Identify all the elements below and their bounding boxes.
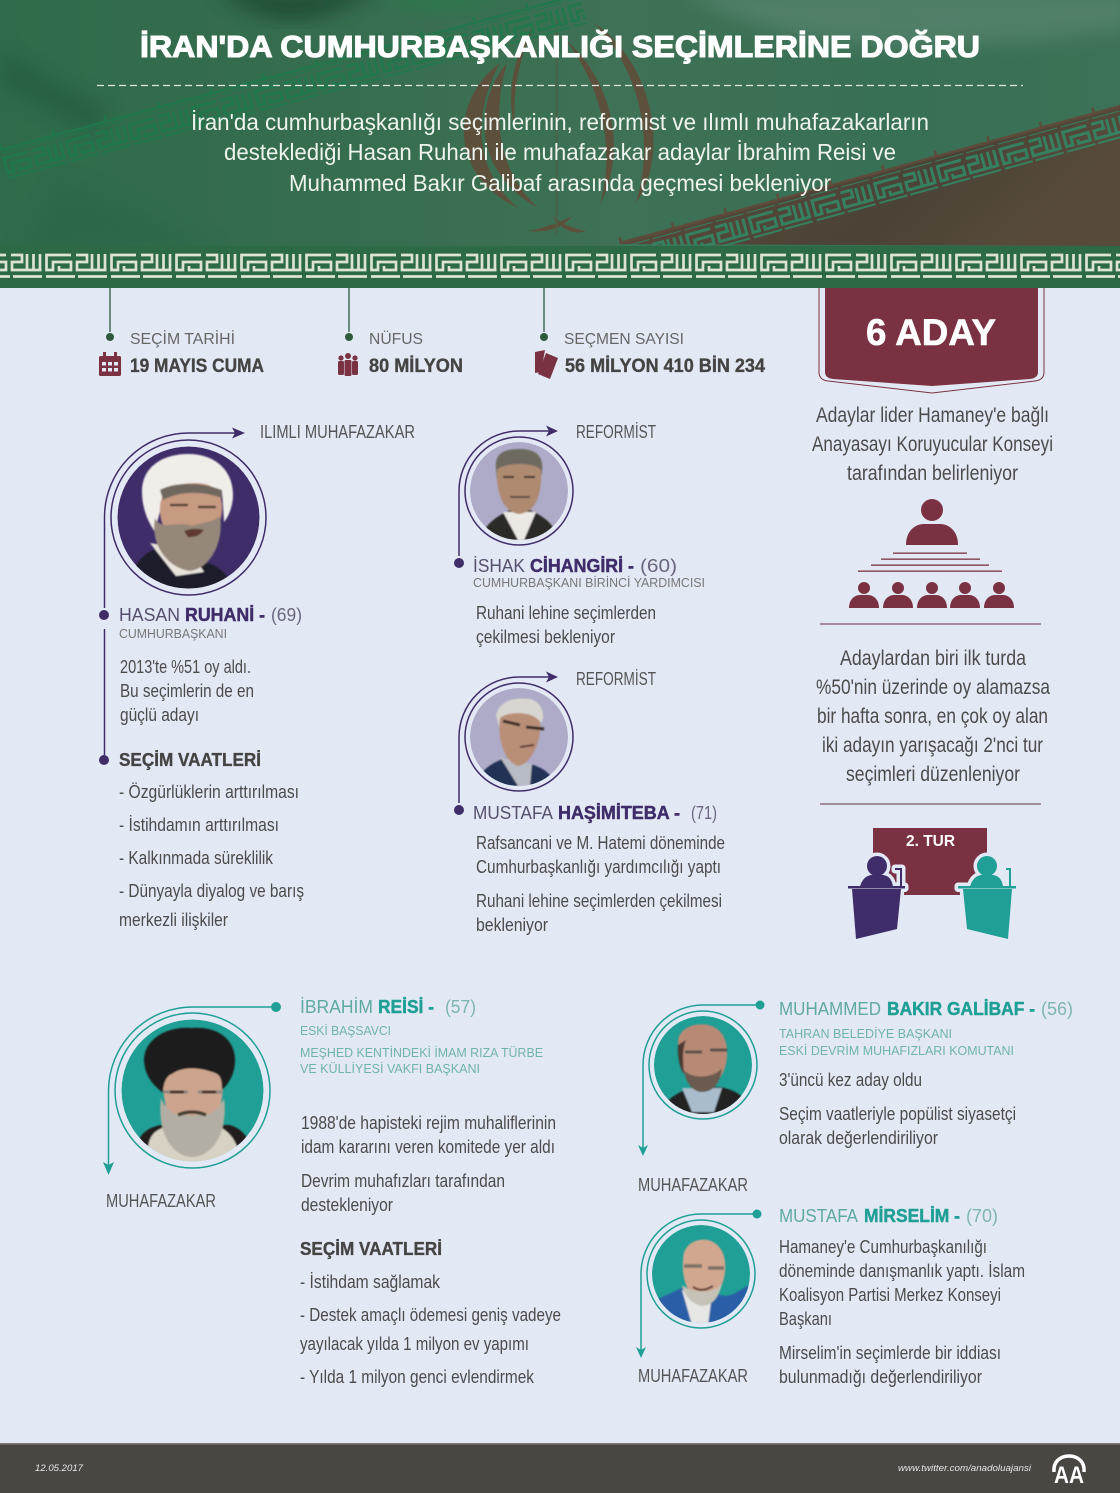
connector arrow <box>108 1007 272 1165</box>
name: Reisi: ESKİ BAŞSAVCI <box>300 1024 391 1038</box>
candidate: Mustafa Mirselim <box>636 1205 1025 1387</box>
text: Hasimiteba description: Ruhani lehine seçimlerden çekilmesi <box>476 890 722 911</box>
text: Ruhani promises: - Özgürlüklerin arttırılması <box>119 781 299 802</box>
icon: calendar <box>99 352 121 376</box>
text: Reisi description: 1988'de hapisteki rejim muhaliflerinin <box>301 1112 556 1133</box>
text: second round rule: seçimleri düzenleniyor <box>846 763 1020 786</box>
text: Reisi promises <box>300 1239 561 1387</box>
text: Cihangiri description: çekilmesi bekleniyor <box>476 626 615 647</box>
portrait: Hasimiteba <box>470 688 568 786</box>
text: Galibaf description: 3'üncü kez aday oldu <box>779 1069 922 1090</box>
text: second round rule <box>816 647 1050 786</box>
portrait: Mirselim <box>652 1225 752 1325</box>
intro text: desteklediği Hasan Ruhani ile muhafazakar adaylar İbrahim Reisi ve <box>224 139 896 165</box>
text: Mirselim description: bulunmadığı değerlendiriliyor <box>779 1366 982 1387</box>
name: Galibaf: MUHAMMED <box>779 998 881 1019</box>
text: Mirselim description: Hamaney'e Cumhurbaşkanılığı <box>779 1236 987 1257</box>
text: Mirselim description: Başkanı <box>779 1308 832 1329</box>
text: council: tarafından belirleniyor <box>847 462 1018 485</box>
banner: 6 aday: 6 ADAY <box>866 312 996 353</box>
decorative kufic band <box>0 246 1120 288</box>
text: Ruhani description: güçlü adayı <box>120 704 199 725</box>
intro text: Muhammed Bakır Galibaf arasında geçmesi bekleniyor <box>289 170 831 196</box>
icon: AA logo: AA <box>1054 1462 1084 1489</box>
text: Mirselim description: Koalisyon Partisi Merkez Konseyi <box>779 1284 1001 1305</box>
text: Mirselim description: döneminde danışmanlık yaptı. İslam <box>779 1260 1025 1281</box>
name: Galibaf <box>756 998 1073 1058</box>
text: second round rule: %50'nin üzerinde oy alamazsa <box>816 676 1050 699</box>
title: İRAN'DA CUMHURBAŞKANLIĞI SEÇİMLERİNE DOĞRU <box>140 29 980 64</box>
text: second round rule: iki adayın yarışacağı 2'nci tur <box>822 734 1043 757</box>
text: Hasimiteba description: bekleniyor <box>476 914 548 935</box>
name: Cihangiri: (60) <box>640 555 677 576</box>
stat: population <box>338 288 463 377</box>
candidate: Ibrahim Reisi: MUHAFAZAKAR <box>106 1190 216 1211</box>
flag: green kufic band <box>0 0 587 179</box>
text: Ruhani promises: SEÇİM VAATLERİ <box>119 750 261 770</box>
connector arrow <box>459 431 552 556</box>
name: Galibaf: (56) <box>1041 998 1073 1019</box>
candidate: Mustafa Hasimiteba <box>454 668 725 935</box>
text: Mirselim description: Mirselim'in seçimlerde bir iddiası <box>779 1342 1001 1363</box>
right column: candidate count and rules <box>812 288 1053 939</box>
name: Hasimiteba <box>454 802 717 823</box>
text: Ruhani promises: - Dünyayla diyalog ve barış <box>119 880 304 901</box>
candidate: Ishak Cihangiri <box>454 421 705 647</box>
name: Reisi: MEŞHED KENTİNDEKİ İMAM RIZA TÜRBE <box>300 1046 543 1060</box>
icon: council pyramid <box>849 499 1014 608</box>
stat: election date: SEÇİM TARİHİ <box>130 329 235 348</box>
name: Mirselim: MİRSELİM - <box>864 1205 960 1226</box>
candidate: Mustafa Hasimiteba: REFORMİST <box>576 668 656 689</box>
connector arrow <box>641 1214 753 1350</box>
name: Ruhani: CUMHURBAŞKANI <box>119 627 227 641</box>
connector arrow <box>643 1005 756 1148</box>
name: Ruhani: RUHANİ - <box>185 604 265 625</box>
text: Reisi description <box>301 1112 556 1215</box>
footer date: 12.05.2017 <box>35 1463 84 1474</box>
name: Galibaf: TAHRAN BELEDİYE BAŞKANI <box>779 1027 952 1041</box>
footer <box>0 1443 1120 1493</box>
text: Reisi description: destekleniyor <box>301 1194 393 1215</box>
name: Reisi <box>271 996 543 1076</box>
text: second round rule: Adaylardan biri ilk turda <box>840 647 1026 670</box>
text: council <box>812 404 1053 485</box>
text: Reisi description: Devrim muhafızları tarafından <box>301 1170 505 1191</box>
candidate: Ibrahim Reisi <box>103 996 561 1387</box>
icon: ballot cards <box>535 350 558 379</box>
name: Mirselim: (70) <box>966 1205 998 1226</box>
intro text: İran'da cumhurbaşkanlığı seçimlerinin, reformist ve ılımlı muhafazakarların <box>191 109 929 135</box>
name: Mirselim: MUSTAFA <box>779 1205 859 1226</box>
banner: 6 aday <box>819 288 1044 393</box>
text: Hasimiteba description: Rafsancani ve M. Hatemi döneminde <box>476 832 725 853</box>
name: Cihangiri: CİHANGİRİ - <box>530 555 634 576</box>
stat: population: 80 MİLYON <box>369 356 463 377</box>
text: Ruhani description: Bu seçimlerin de en <box>120 680 254 701</box>
text: Galibaf description <box>779 1069 1016 1148</box>
connector arrow <box>459 677 552 803</box>
name: Galibaf: ESKİ DEVRİM MUHAFIZLARI KOMUTANI <box>779 1044 1014 1058</box>
name: Cihangiri <box>454 555 705 590</box>
name: Ruhani: HASAN <box>119 604 180 625</box>
portrait: Ruhani <box>118 446 260 590</box>
text: Cihangiri description <box>476 602 656 647</box>
text: council: Adaylar lider Hamaney'e bağlı <box>816 404 1049 427</box>
stat: population: NÜFUS <box>369 330 423 348</box>
name: Hasimiteba: HAŞİMİTEBA - <box>558 802 680 823</box>
portrait: Reisi <box>122 1020 264 1165</box>
name: Reisi: VE KÜLLİYESİ VAKFI BAŞKANI <box>300 1062 480 1076</box>
candidate: Mustafa Mirselim: MUHAFAZAKAR <box>638 1365 748 1386</box>
header: flag background <box>0 0 1120 273</box>
text: second round rule: bir hafta sonra, en çok oy alan <box>817 705 1048 728</box>
text: Ruhani promises <box>99 750 304 930</box>
text: Hasimiteba description <box>476 832 725 935</box>
text: Ruhani description: 2013'te %51 oy aldı. <box>120 656 251 677</box>
icon: second round debate: 2. TUR <box>906 833 955 850</box>
text: Reisi promises: - İstihdam sağlamak <box>300 1271 441 1292</box>
text: Ruhani description <box>120 656 254 725</box>
text: Hasimiteba description: Cumhurbaşkanlığı yardımcılığı yaptı <box>476 856 721 877</box>
connector arrow <box>104 433 240 755</box>
stat: voters: SEÇMEN SAYISI <box>564 331 684 348</box>
text: Ruhani promises: - İstihdamın arttırılması <box>119 814 279 835</box>
stat: voters: 56 MİLYON 410 BİN 234 <box>565 356 765 377</box>
candidate: Muhammed Bakir Galibaf: MUHAFAZAKAR <box>638 1174 748 1195</box>
name: Hasimiteba: (71) <box>691 802 717 823</box>
name: Cihangiri: CUMHURBAŞKANI BİRİNCİ YARDIMCISI <box>473 576 705 590</box>
footer link: www.twitter.com/anadoluajansi <box>898 1463 1032 1474</box>
candidate: Muhammed Bakir Galibaf <box>638 998 1073 1195</box>
flag: brown lower stripe <box>620 107 1120 246</box>
portrait: Cihangiri <box>470 442 568 540</box>
stat: election date <box>99 288 264 377</box>
text: Ruhani promises: - Kalkınmada süreklilik <box>119 847 274 868</box>
text: Galibaf description: olarak değerlendiriliyor <box>779 1127 938 1148</box>
name: Ruhani: (69) <box>271 604 302 625</box>
text: Reisi promises: - Yılda 1 milyon genci evlendirmek <box>300 1366 535 1387</box>
name: Cihangiri: İSHAK <box>473 555 526 576</box>
intro text <box>191 109 929 196</box>
text: council: Anayasayı Koruyucular Konseyi <box>812 433 1053 456</box>
candidate: Hasan Ruhani: ILIMLI MUHAFAZAKAR <box>260 421 415 442</box>
portrait: Galibaf <box>654 1016 752 1120</box>
name: Reisi: REİSİ - <box>378 996 434 1017</box>
name: Hasimiteba: MUSTAFA <box>473 802 554 823</box>
name: Mirselim <box>752 1205 998 1226</box>
icon: people <box>338 353 358 376</box>
text: Reisi promises: yayılacak yılda 1 milyon ev yapımı <box>300 1333 529 1354</box>
name: Reisi: İBRAHİM <box>300 996 373 1017</box>
candidate: Ishak Cihangiri: REFORMİST <box>576 421 656 442</box>
text: Reisi description: idam kararını veren komitede yer aldı <box>301 1136 555 1157</box>
text: Reisi promises: SEÇİM VAATLERİ <box>300 1239 442 1259</box>
text: Mirselim description <box>779 1236 1025 1387</box>
stat: election date: 19 MAYIS CUMA <box>130 356 264 377</box>
name: Galibaf: BAKIR GALİBAF - <box>887 998 1035 1019</box>
name: Ruhani <box>99 604 302 641</box>
text: Reisi promises: - Destek amaçlı ödemesi geniş vadeye <box>300 1304 561 1325</box>
icon: second round debate <box>848 828 1016 939</box>
text: Galibaf description: Seçim vaatleriyle popülist siyasetçi <box>779 1103 1016 1124</box>
stat: voters <box>535 288 765 379</box>
name: Reisi: (57) <box>445 996 476 1017</box>
flag: brown kufic band <box>618 105 1120 246</box>
text: Ruhani promises: merkezli ilişkiler <box>119 909 228 930</box>
flag: emblem <box>464 23 654 232</box>
text: Cihangiri description: Ruhani lehine seçimlerden <box>476 602 656 623</box>
candidate: Hasan Ruhani <box>99 421 415 930</box>
